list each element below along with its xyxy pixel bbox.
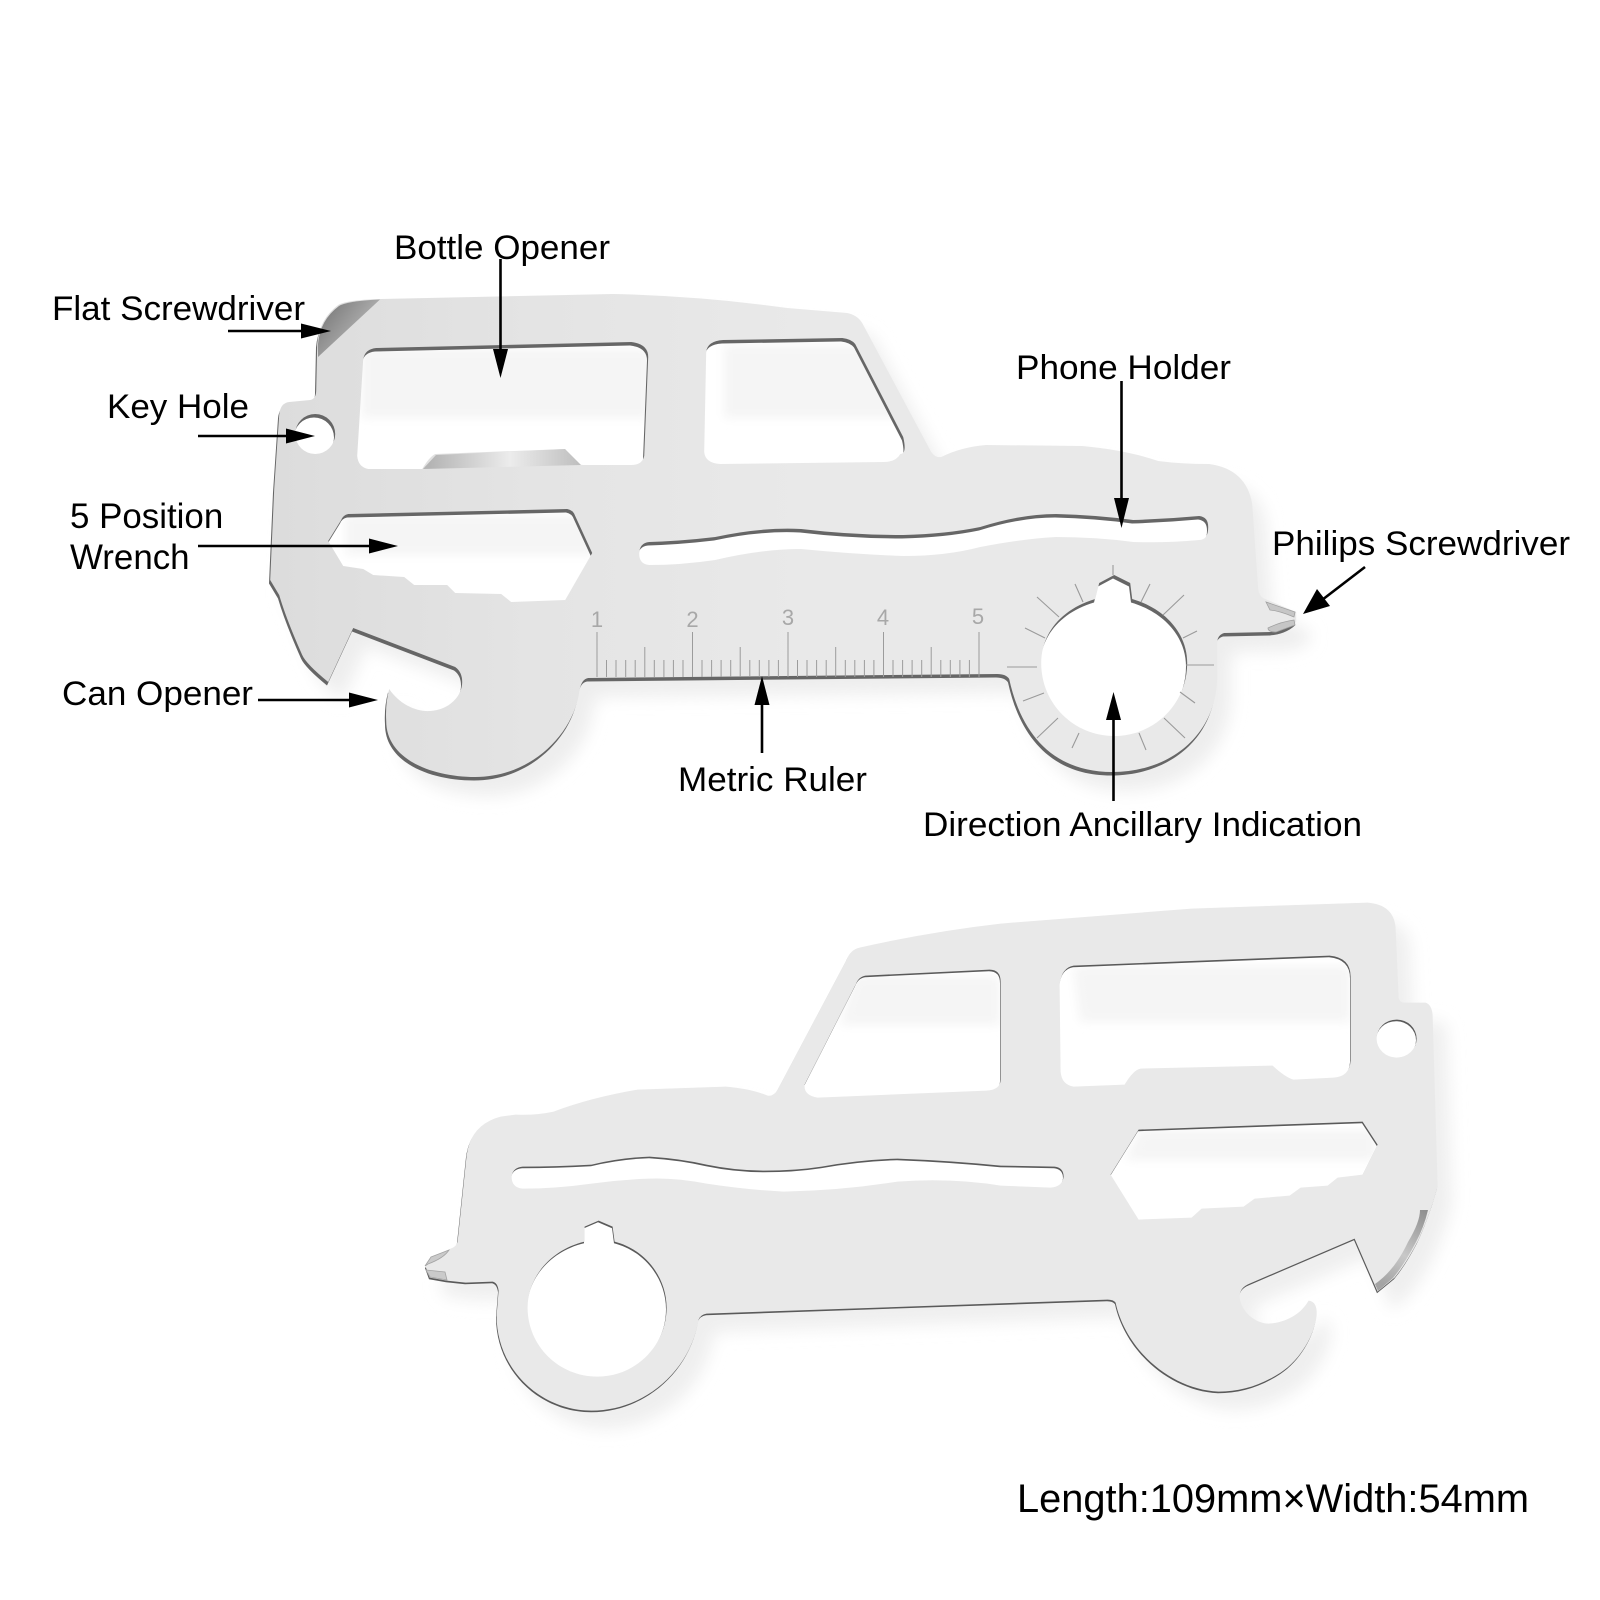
arrow: metric ruler [754, 676, 770, 753]
flat screwdriver bevel [318, 300, 380, 357]
bottle opener bevel [423, 449, 581, 469]
direction compass ticks [1007, 565, 1214, 773]
metric ruler: 1 [591, 607, 603, 632]
arrow: flat screwdriver [228, 324, 331, 338]
arrow: can opener [258, 692, 378, 708]
philips screwdriver tip [1266, 602, 1295, 632]
bottom tool body [426, 903, 1438, 1411]
arrow: key hole [198, 428, 315, 444]
arrow: wrench [198, 538, 398, 554]
label: bottle opener: Bottle Opener [394, 229, 610, 267]
metric ruler: 2 [686, 607, 699, 632]
metric ruler: 3 [782, 605, 794, 630]
label: direction ancillary indication: Direction Ancillary Indication [923, 806, 1362, 844]
dimensions caption: Length:109mm×Width:54mm [1017, 1477, 1529, 1521]
top tool shadow [322, 338, 1306, 796]
can opener blade bevel [1375, 1210, 1428, 1291]
label: key hole: Key Hole [107, 388, 249, 426]
metric ruler: 4 [877, 605, 889, 630]
top tool dark edge [269, 298, 1295, 780]
arrow: phone holder [1114, 381, 1129, 528]
label: flat screwdriver: Flat Screwdriver [52, 290, 305, 328]
panel: bottom multi-tool [425, 903, 1452, 1429]
bottom tool dark edge [425, 904, 1437, 1412]
label: phone holder: Phone Holder [1016, 349, 1231, 387]
metric ruler: 5 [972, 604, 984, 629]
panel: top multi-tool with callouts [52, 229, 1570, 844]
bottom tool shadow [425, 903, 1452, 1429]
label: 5 position wrench: 5 Position [70, 497, 223, 536]
top tool body [270, 294, 1296, 777]
label: can opener: Can Opener [62, 675, 253, 713]
arrow: philips screwdriver [1303, 567, 1365, 614]
label: metric ruler: Metric Ruler [678, 761, 867, 799]
arrow: bottle opener [493, 259, 508, 378]
label: 5 position wrench: Wrench [70, 538, 190, 577]
label: philips screwdriver: Philips Screwdriver [1272, 525, 1570, 563]
arrow: direction indication [1106, 692, 1121, 801]
metric ruler [591, 604, 984, 677]
bottom philips tip [425, 1250, 449, 1280]
